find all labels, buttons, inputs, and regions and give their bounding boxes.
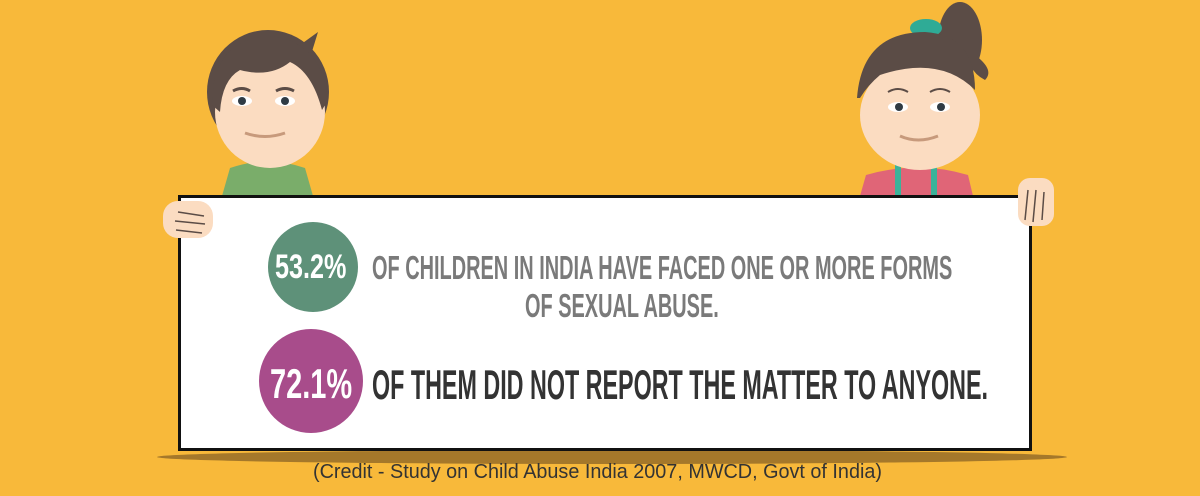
stat 1 number: 53.2% — [275, 248, 346, 286]
board — [180, 196, 1030, 450]
stat 1 text line 1: OF CHILDREN IN INDIA HAVE FACED ONE OR MORE FORMS — [372, 249, 952, 286]
stat 2 number: 72.1% — [270, 360, 352, 407]
circle: 72.1% — [259, 329, 363, 433]
circle: 53.2% — [268, 222, 358, 312]
credit: (Credit - Study on Child Abuse India 2007, MWCD, Govt of India) — [313, 461, 882, 483]
girl character — [857, 2, 988, 196]
boy character — [207, 30, 329, 196]
boy hand — [163, 201, 213, 238]
stat 2 text: OF THEM DID NOT REPORT THE MATTER TO ANYONE. — [372, 361, 988, 408]
stat 1 text line 2: OF SEXUAL ABUSE. — [525, 287, 719, 324]
board shadow — [157, 450, 1067, 464]
girl hand — [1018, 178, 1054, 226]
